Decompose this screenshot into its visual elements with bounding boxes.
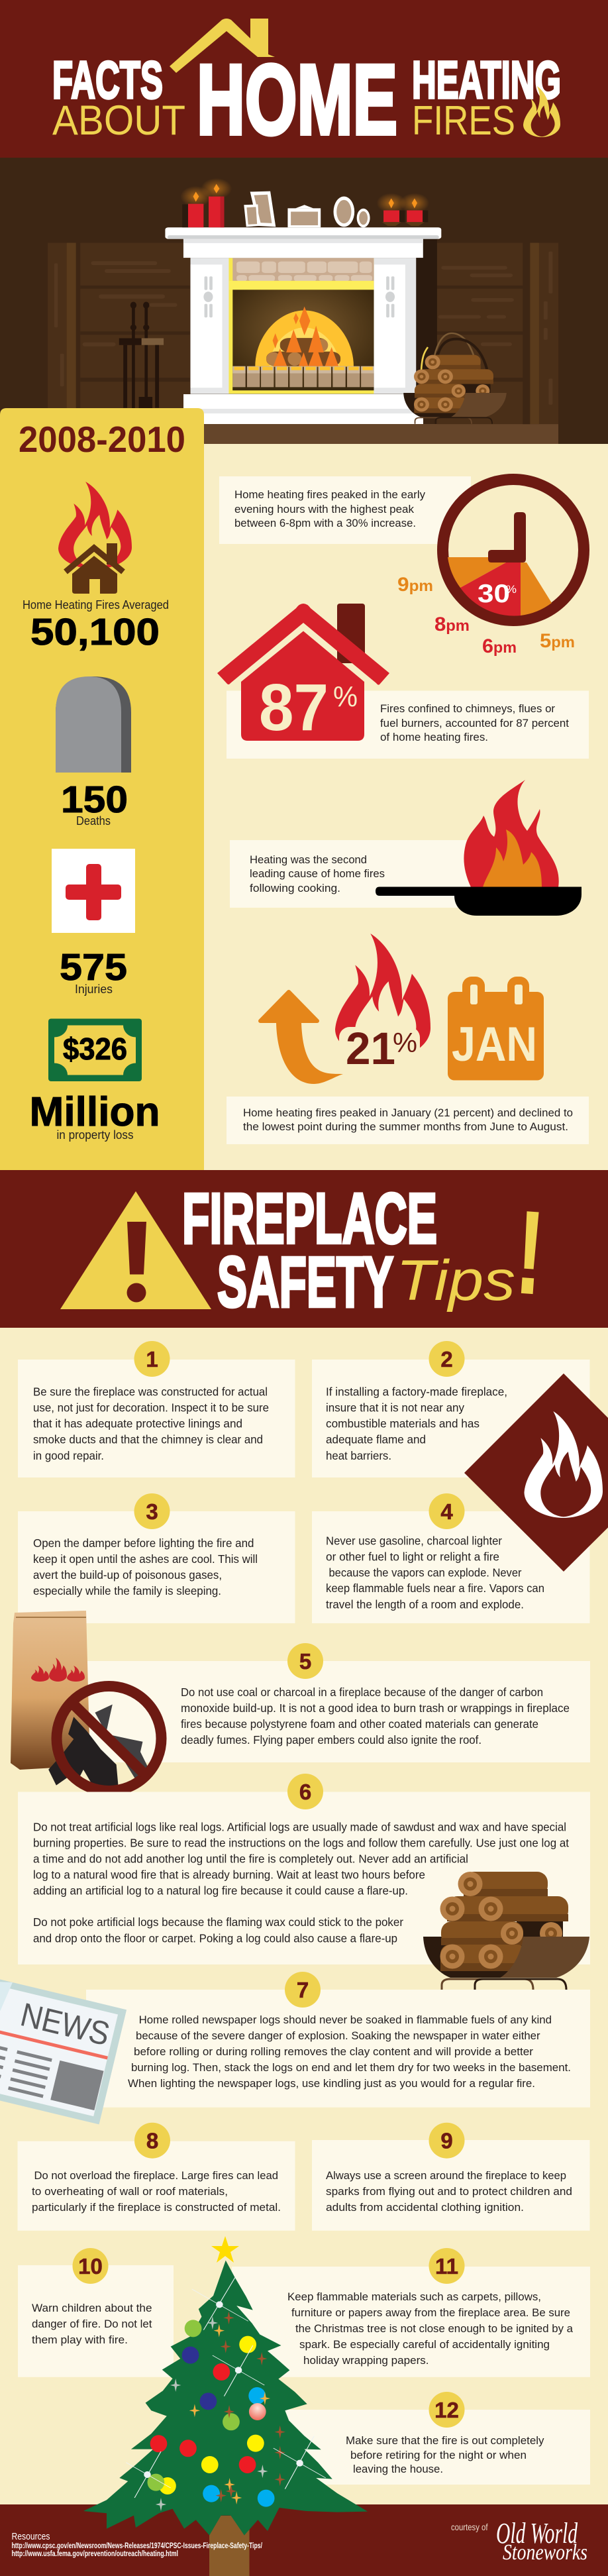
icon: title flame bbox=[523, 86, 560, 137]
heading: years: 2008-2010 bbox=[19, 419, 185, 460]
fact: January peak bbox=[227, 934, 589, 1144]
badge 5 bbox=[287, 1643, 323, 1679]
fact text bbox=[234, 488, 425, 529]
tip text: Never use gasoline, charcoal lighter bbox=[326, 1534, 502, 1548]
clock chart: % bbox=[506, 583, 517, 596]
icon: no coal sign bbox=[48, 1686, 162, 1791]
badge 7 bbox=[285, 1972, 321, 2008]
tip text: monoxide build-up. It is not a good idea to burn trash or wrappings in fireplace bbox=[181, 1701, 570, 1715]
tip text: If installing a factory-made fireplace, bbox=[326, 1385, 507, 1398]
fact text: leading cause of home fires bbox=[250, 867, 385, 880]
tip text: Always use a screen around the fireplace to keep bbox=[326, 2170, 566, 2182]
tip text: because the vapors can explode. Never bbox=[329, 1566, 522, 1580]
icon: house 87 percent: % bbox=[333, 680, 358, 713]
icon: flame with percent: % bbox=[393, 1027, 417, 1058]
fact box: the lowest point during the summer months from June to August. bbox=[243, 1120, 568, 1133]
badge 2: 2 bbox=[440, 1347, 453, 1371]
tip 5 bbox=[66, 1643, 590, 1762]
floor bbox=[0, 424, 558, 444]
tip text: holiday wrapping papers. bbox=[303, 2355, 429, 2367]
label: fires averaged: Home Heating Fires Averaged bbox=[23, 598, 169, 612]
badge 1: 1 bbox=[146, 1347, 158, 1371]
tip text: danger of fire. Do not let bbox=[32, 2318, 152, 2330]
tip 9 bbox=[312, 2123, 589, 2231]
icon: newspaper bbox=[0, 1968, 127, 2124]
hour labels: 8pm bbox=[434, 614, 470, 635]
tip text: Make sure that the fire is out completely bbox=[346, 2435, 544, 2447]
fact text: Home heating fires peaked in the early bbox=[234, 488, 425, 501]
icon: warning triangle bbox=[60, 1191, 211, 1309]
tip text: log to a natural wood fire that is already burning. Wait at least two hours before bbox=[33, 1868, 425, 1882]
tip text bbox=[326, 1385, 507, 1462]
tip text: keep flammable fuels near a fire. Vapors can bbox=[326, 1582, 544, 1595]
tip 1 bbox=[18, 1341, 295, 1477]
firebox bbox=[228, 258, 374, 394]
tip text: use, not just for decoration. Inspect it to be sure bbox=[33, 1401, 269, 1415]
stat: 150: 150 bbox=[61, 778, 128, 821]
label: injuries: Injuries bbox=[75, 983, 113, 996]
badge 8: 8 bbox=[146, 2129, 158, 2153]
heading: fireplace: FIREPLACE bbox=[182, 1178, 437, 1258]
fact: evening peak bbox=[219, 476, 584, 657]
tip text bbox=[287, 2291, 574, 2367]
fact box: Home heating fires peaked in January (21 percent) and declined to bbox=[243, 1106, 573, 1119]
label: deaths: Deaths bbox=[76, 814, 111, 828]
icon: up arrow bbox=[260, 992, 343, 1084]
fireplace surround bbox=[165, 227, 441, 396]
tip text: in good repair. bbox=[33, 1449, 104, 1462]
badge 10 bbox=[73, 2248, 109, 2284]
heading: safety: SAFETY bbox=[217, 1242, 393, 1322]
fact text: Heating was the second bbox=[250, 853, 367, 866]
icon: burning house bbox=[58, 482, 132, 594]
stat: 575: 575 bbox=[60, 946, 127, 989]
resources bbox=[12, 2531, 263, 2558]
tip text: smoke ducts and that the chimney is clear and bbox=[33, 1433, 263, 1446]
heading: tips: ! bbox=[511, 1185, 548, 1320]
tip text bbox=[32, 2170, 281, 2214]
fact: 87 percent chimneys bbox=[217, 604, 589, 759]
tip 12 bbox=[285, 2392, 590, 2485]
tip text: that it has adequate protective linings and bbox=[33, 1417, 242, 1430]
fact text: between 6-8pm with a 30% increase. bbox=[234, 517, 416, 529]
badge 8 bbox=[134, 2123, 170, 2159]
fact text: evening hours with the highest peak bbox=[234, 503, 414, 515]
tip 7 bbox=[86, 1972, 590, 2108]
fireplace scene bbox=[0, 158, 608, 444]
clock chart bbox=[442, 480, 584, 620]
tip text bbox=[326, 2170, 572, 2214]
hour labels: 5pm bbox=[540, 630, 575, 652]
tip text: adequate flame and bbox=[326, 1433, 426, 1446]
tip text: particularly if the fireplace is constructed of metal. bbox=[32, 2202, 281, 2214]
small sparkles bbox=[156, 2311, 285, 2511]
tip text: before rolling or during rolling removes the clay content and will provide a better bbox=[134, 2046, 534, 2058]
icon: calendar: JAN bbox=[452, 1018, 537, 1071]
badge 9 bbox=[429, 2123, 465, 2159]
ornaments bbox=[147, 2320, 275, 2507]
tip text bbox=[326, 1534, 544, 1611]
tip text: sparks from flying out and to protect children and bbox=[326, 2186, 572, 2198]
badge 12 bbox=[429, 2392, 465, 2428]
tip text: Open the damper before lighting the fire and bbox=[33, 1536, 254, 1550]
title: About: ABOUT bbox=[52, 97, 185, 144]
badge 6 bbox=[287, 1774, 323, 1809]
badge 3 bbox=[134, 1493, 170, 1529]
icon: calendar bbox=[448, 977, 544, 1080]
tip text bbox=[33, 1385, 269, 1462]
badge 2 bbox=[429, 1341, 465, 1377]
tip text: burning log. Then, stack the logs on end and let them dry for two weeks in the basement. bbox=[131, 2062, 571, 2074]
heading: tips: Tips bbox=[396, 1249, 515, 1313]
hour labels: 6pm bbox=[482, 635, 517, 657]
icon: flaming pan bbox=[376, 780, 582, 916]
tip 11 bbox=[232, 2248, 590, 2377]
courtesy logo: courtesy of bbox=[451, 2522, 488, 2532]
newspaper title: NEWS bbox=[17, 1996, 113, 2053]
icon: tombstone bbox=[56, 676, 131, 773]
courtesy logo: Stoneworks bbox=[503, 2540, 587, 2565]
icon: flame with percent: 21 bbox=[346, 1023, 395, 1074]
badge 12: 12 bbox=[434, 2398, 459, 2422]
tip text: burning properties. Be sure to read the instructions on the logs and follow them carefully. Use just one log at bbox=[33, 1837, 569, 1850]
stats side panel bbox=[0, 408, 204, 1170]
icon: house 87 percent bbox=[217, 604, 389, 745]
wall panelling bbox=[48, 178, 558, 424]
tip 2 bbox=[312, 1341, 589, 1477]
tip text bbox=[32, 2302, 152, 2346]
tip text: them play with fire. bbox=[32, 2334, 128, 2346]
fact text bbox=[380, 702, 569, 743]
value: 87 bbox=[259, 671, 329, 745]
badge 11: 11 bbox=[435, 2254, 458, 2279]
icon: charcoal bag bbox=[11, 1611, 90, 1770]
tip text: the Christmas tree is not close enough to be ignited by a bbox=[295, 2323, 574, 2335]
fact text: fuel burners, accounted for 87 percent bbox=[380, 717, 569, 729]
large sparkles bbox=[126, 2277, 326, 2498]
tip text bbox=[128, 2014, 571, 2090]
fireplace base bbox=[183, 394, 423, 424]
icon: flame with percent bbox=[335, 934, 431, 1074]
title: Home: HOME bbox=[197, 44, 397, 155]
fact text bbox=[250, 853, 385, 894]
tip text bbox=[33, 1536, 258, 1597]
tip text: adding an artificial log to a natural log fire because it could cause a flare-up. bbox=[33, 1884, 408, 1898]
tip text: insure that it is not near any bbox=[326, 1401, 464, 1415]
icon: log basket bbox=[423, 1872, 589, 1990]
badge 3: 3 bbox=[146, 1499, 158, 1524]
fact: second leading cause bbox=[230, 780, 582, 916]
house roof icon bbox=[170, 19, 275, 73]
fact text: Fires confined to chimneys, flues or bbox=[380, 702, 555, 715]
tip text: adults from accidental clothing ignition. bbox=[326, 2202, 524, 2214]
courtesy logo bbox=[451, 2517, 587, 2565]
fact box bbox=[227, 1097, 589, 1144]
tip text: Do not poke artificial logs because the flaming wax could stick to the poker bbox=[33, 1915, 403, 1929]
tip text: When lighting the newspaper logs, use kindling just as you would for a regular fire. bbox=[128, 2078, 535, 2090]
tip text: travel the length of a room and explode. bbox=[326, 1598, 524, 1611]
tip text: heat barriers. bbox=[326, 1449, 391, 1462]
tip text: Warn children about the bbox=[32, 2302, 152, 2314]
header band bbox=[0, 0, 608, 158]
tip text: to overheating of wall or roof materials, bbox=[32, 2186, 228, 2198]
picture frames bbox=[244, 191, 370, 227]
tip text: Be sure the fireplace was constructed for actual bbox=[33, 1385, 268, 1398]
badge 4 bbox=[429, 1493, 465, 1529]
stat: 50,100: 50,100 bbox=[30, 611, 160, 653]
log basket by the hearth bbox=[403, 355, 507, 424]
icon: banknote bbox=[48, 1019, 142, 1081]
wedge value: 30 bbox=[478, 580, 510, 608]
badge 7: 7 bbox=[297, 1978, 309, 2002]
tip text: keep it open until the ashes are cool. This will bbox=[33, 1552, 258, 1566]
resources: http://www.usfa.fema.gov/prevention/outreach/heating.html bbox=[12, 2550, 178, 2558]
tip text: deadly fumes. Flying paper embers could also ignite the roof. bbox=[181, 1733, 481, 1746]
fact text: following cooking. bbox=[250, 882, 340, 894]
tip text: Keep flammable materials such as carpets, pillows, bbox=[287, 2291, 541, 2303]
tip text bbox=[33, 1821, 569, 1945]
stat: million: Million bbox=[29, 1089, 160, 1135]
banknote value: $326 bbox=[63, 1032, 127, 1066]
footer band bbox=[0, 2504, 608, 2576]
hour labels bbox=[397, 574, 575, 657]
icon: medical cross bbox=[52, 849, 135, 933]
tip text: combustible materials and has bbox=[326, 1417, 480, 1430]
tip 3 bbox=[18, 1493, 295, 1623]
tip text: and drop onto the floor or carpet. Poking a log could also cause a flare-up bbox=[33, 1932, 397, 1945]
mantel candles bbox=[180, 178, 429, 227]
tip text: Home rolled newspaper logs should never be soaked in flammable fuels of any kind bbox=[139, 2014, 552, 2026]
badge 4: 4 bbox=[440, 1499, 453, 1524]
tip text: avert the build-up of poisonous gases, bbox=[33, 1568, 222, 1582]
badge 6: 6 bbox=[299, 1780, 311, 1804]
tip text: Do not use coal or charcoal in a fireplace because of the danger of carbon bbox=[181, 1686, 543, 1699]
badge 10: 10 bbox=[78, 2254, 103, 2279]
tip text: especially while the family is sleeping. bbox=[33, 1584, 221, 1597]
basket handle bbox=[421, 333, 489, 398]
tip text: spark. Be especially careful of accidentally igniting bbox=[299, 2339, 550, 2351]
tip 6 bbox=[18, 1774, 590, 1964]
tip 4 bbox=[312, 1493, 589, 1623]
icon: christmas tree bbox=[83, 2236, 368, 2576]
fact text: of home heating fires. bbox=[380, 731, 488, 743]
badge 9: 9 bbox=[440, 2129, 453, 2153]
tip text: leaving the house. bbox=[353, 2463, 443, 2475]
tip 8 bbox=[17, 2123, 295, 2231]
heading: tips bbox=[396, 1185, 548, 1320]
tip text: before retiring for the night or when bbox=[350, 2449, 527, 2461]
tip text: or other fuel to light or relight a fire bbox=[326, 1550, 499, 1564]
tip text: Do not treat artificial logs like real logs. Artificial logs are usually made of sawdust and wax and have special bbox=[33, 1821, 566, 1834]
icon: flame diamond bbox=[464, 1373, 608, 1572]
tip text bbox=[346, 2435, 544, 2475]
tip text bbox=[181, 1686, 570, 1746]
tip 10 bbox=[18, 2248, 174, 2377]
badge 1 bbox=[134, 1341, 170, 1377]
resources: http://www.cpsc.gov/en/Newsroom/News-Releases/1974/CPSC-Issues-Fireplace-Safety-Tips/ bbox=[12, 2542, 263, 2550]
badge 11 bbox=[429, 2248, 465, 2284]
tip text: furniture or papers away from the fireplace area. Be sure bbox=[291, 2307, 570, 2319]
hour labels: 9pm bbox=[397, 574, 433, 596]
title: Facts: FACTS bbox=[52, 50, 163, 109]
resources: Resources bbox=[12, 2531, 50, 2542]
tip text: a time and do not add another log until the fire is completely out. Never add an artificial bbox=[33, 1852, 468, 1866]
tip text: Do not overload the fireplace. Large fires can lead bbox=[34, 2170, 278, 2182]
tip text: fires because polystyrene foam and other coated materials can generate bbox=[181, 1717, 538, 1731]
badge 5: 5 bbox=[299, 1649, 311, 1674]
safety tips banner bbox=[0, 1170, 608, 1328]
label: property loss: in property loss bbox=[57, 1128, 134, 1142]
fire tools stand bbox=[119, 302, 164, 409]
title: Fires: FIRES bbox=[412, 98, 515, 144]
tip text: because of the severe danger of explosion. Soaking the newspaper in water either bbox=[136, 2030, 540, 2042]
